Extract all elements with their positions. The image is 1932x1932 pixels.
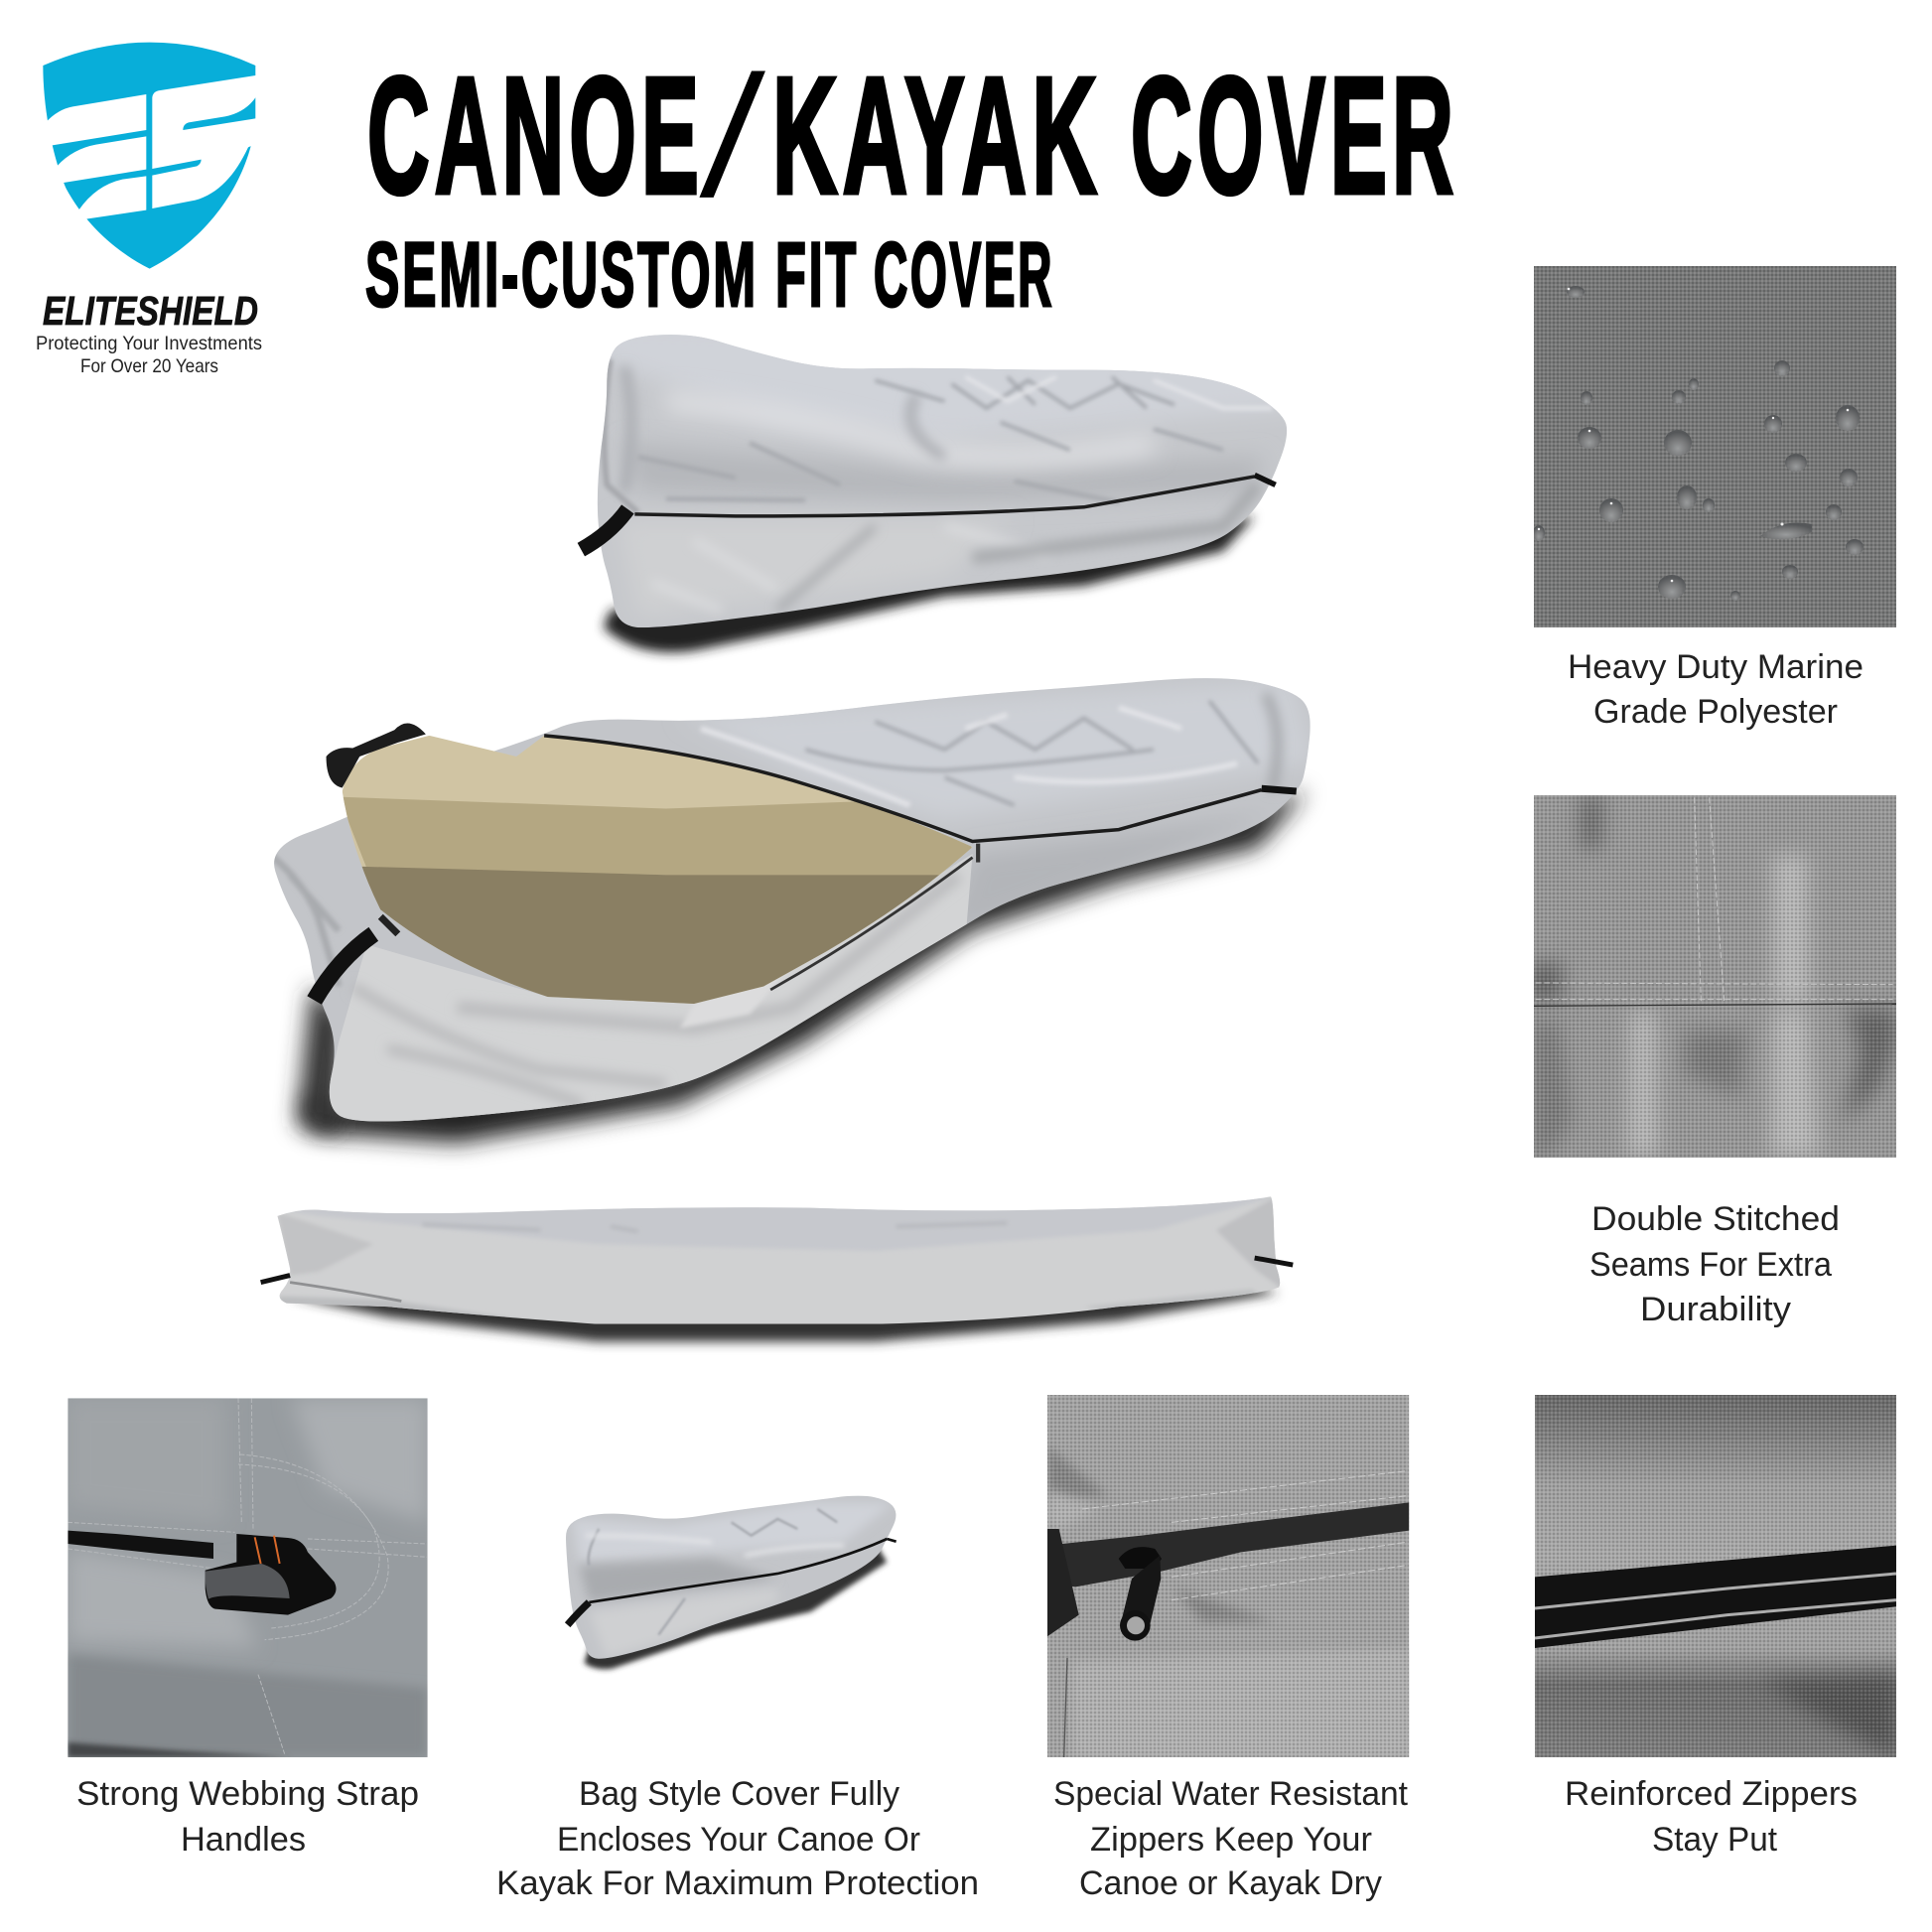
product photo: partly unzipped cover over tan kayak bbox=[248, 666, 1334, 1143]
caption: bag style: Encloses Your Canoe Or bbox=[557, 1821, 920, 1859]
caption: seams bbox=[1589, 1200, 1840, 1328]
caption: webbing strap: Strong Webbing Strap bbox=[76, 1775, 419, 1813]
title: KAYAK bbox=[772, 44, 1102, 228]
kayak handle bbox=[327, 723, 426, 788]
subtitle: FIT bbox=[775, 224, 859, 326]
caption: seams: Durability bbox=[1640, 1291, 1791, 1328]
feature photo: webbing strap handle bbox=[68, 1398, 428, 1757]
feature photo: water beading on polyester bbox=[1533, 266, 1896, 627]
caption: seams: Double Stitched bbox=[1591, 1200, 1840, 1238]
subtitle: SEMI-CUSTOM bbox=[365, 224, 759, 326]
subtitle: COVER bbox=[874, 224, 1054, 326]
title: COVER bbox=[1131, 44, 1458, 228]
product photo: zipped cover, side view bbox=[261, 1188, 1293, 1341]
caption: bag style: Kayak For Maximum Protection bbox=[496, 1864, 979, 1902]
caption: bag style: Bag Style Cover Fully bbox=[579, 1775, 899, 1813]
tagline: For Over 20 Years bbox=[80, 355, 218, 377]
brand name: ELITESHIELD bbox=[43, 288, 258, 334]
icon: blue shield with ES monogram bbox=[40, 43, 260, 269]
caption: zippers dry: Canoe or Kayak Dry bbox=[1079, 1864, 1382, 1902]
caption: zippers dry: Special Water Resistant bbox=[1053, 1775, 1409, 1813]
caption: polyester: Grade Polyester bbox=[1593, 693, 1838, 731]
feature photo: double stitched seams bbox=[1529, 795, 1896, 1158]
feature photo: reinforced zipper with stitching bbox=[1535, 1395, 1896, 1757]
caption: zippers dry: Zippers Keep Your bbox=[1090, 1821, 1372, 1859]
feature photo: small bagged cover bbox=[559, 1489, 903, 1669]
caption: zippers dry bbox=[1053, 1775, 1409, 1902]
caption: polyester bbox=[1568, 648, 1863, 731]
caption: reinforced zippers: Stay Put bbox=[1652, 1821, 1778, 1859]
title bbox=[367, 44, 1458, 228]
caption: bag style bbox=[496, 1775, 979, 1902]
caption: seams: Seams For Extra bbox=[1589, 1246, 1832, 1284]
tagline: Protecting Your Investments bbox=[36, 333, 262, 354]
logo: EliteShield shield and wordmark bbox=[36, 43, 262, 377]
title: CANOE bbox=[367, 44, 704, 228]
caption: polyester: Heavy Duty Marine bbox=[1568, 648, 1863, 686]
title: / bbox=[690, 44, 773, 228]
feature photo: water resistant zipper and pull bbox=[1047, 1395, 1409, 1757]
caption: reinforced zippers bbox=[1565, 1775, 1858, 1859]
tagline bbox=[36, 333, 262, 377]
caption: webbing strap: Handles bbox=[181, 1821, 306, 1859]
product photo: zipped cover, top bbox=[581, 318, 1307, 652]
caption: reinforced zippers: Reinforced Zippers bbox=[1565, 1775, 1858, 1813]
caption: webbing strap bbox=[76, 1775, 419, 1859]
